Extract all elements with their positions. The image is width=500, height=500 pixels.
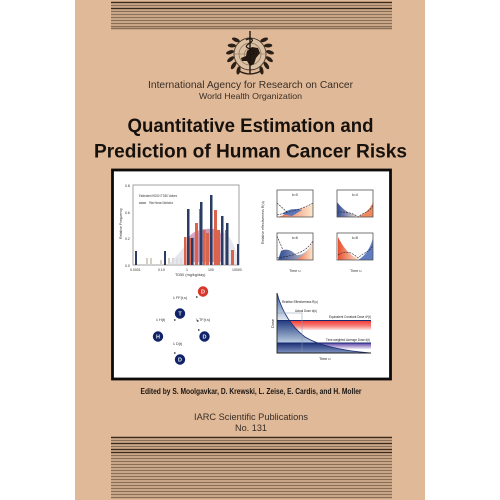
- axis labels: 0.2: [125, 237, 130, 241]
- icon: WHO emblem: [226, 31, 274, 75]
- axis labels: 100: [208, 268, 214, 272]
- wreath leaves: [226, 36, 274, 75]
- axis labels: 0.10: [158, 268, 165, 272]
- network diagram: [153, 286, 211, 365]
- equivalent constant dose chart: [271, 293, 371, 361]
- globe: [234, 38, 266, 70]
- node D red: D: [201, 290, 205, 296]
- histogram chart: Relative Frequency: [119, 208, 123, 239]
- series name: IARC Scientific Publications: [194, 412, 308, 423]
- axis labels: 1: [186, 268, 188, 272]
- small multiples chart: Time u: [289, 269, 300, 273]
- equivalent constant dose chart: Equivalent Constant Dose d*(t): [329, 315, 371, 319]
- histogram chart: Fitted Human Distribution: [149, 201, 173, 205]
- small multiples chart: Relative effectiveness R(u): [261, 201, 265, 244]
- title: [94, 115, 407, 162]
- axis labels: [125, 184, 242, 272]
- axis labels: 0.6: [125, 211, 130, 215]
- navy bars: [135, 195, 239, 265]
- distribution: [168, 229, 239, 264]
- panel top-left: k=0: [292, 193, 298, 197]
- node T: T: [178, 312, 182, 318]
- organisation subtitle: World Health Organization: [199, 92, 302, 101]
- panel bottom-right: k=8: [352, 236, 358, 240]
- top stripes: [111, 2, 392, 28]
- title: Prediction of Human Cancer Risks: [94, 140, 407, 162]
- equivalent constant dose chart: Time u: [319, 357, 330, 361]
- node H: H: [156, 334, 160, 340]
- staff and snake: [249, 31, 251, 74]
- equivalent constant dose chart: Actual Dose d(u): [295, 309, 317, 313]
- small multiples chart: Time u: [350, 269, 361, 273]
- network diagram: λ FF(t,s): [173, 296, 188, 300]
- red bars: [184, 209, 234, 265]
- title: Quantitative Estimation and: [128, 115, 374, 137]
- bottom stripes: [111, 438, 392, 498]
- axis labels: 0.8: [125, 184, 130, 188]
- legend: Estimated HD50 /TD50 Values: [139, 194, 177, 198]
- equivalent constant dose chart: Dose: [271, 319, 275, 328]
- histogram chart: TD50 (mg/kg/day): [175, 273, 206, 277]
- grey bars: [146, 258, 198, 265]
- figure panel: [112, 170, 390, 379]
- equivalent constant dose chart: Time-weighted Average Dose d(t): [326, 338, 370, 342]
- equivalent constant dose chart: Relative Effectiveness R(u): [282, 300, 318, 304]
- node D right: D: [203, 334, 207, 340]
- organisation name: International Agency for Research on Cancer: [148, 80, 354, 91]
- axis labels: 10000: [232, 268, 242, 272]
- network diagram: λ TF(t,s): [196, 318, 211, 322]
- small multiples chart: [261, 190, 373, 273]
- axis labels: 0.0001: [130, 268, 141, 272]
- book cover background: [75, 0, 425, 500]
- editors: Edited by S. Moolgavkar, D. Krewski, L. Zeise, E. Cardis, and H. Moller: [140, 387, 362, 396]
- network diagram: λ H(t): [156, 318, 166, 322]
- histogram chart: [119, 184, 242, 277]
- axis labels: 0.0: [125, 264, 130, 268]
- network diagram: λ D(t): [173, 342, 183, 346]
- panel bottom-left: k=6: [292, 236, 298, 240]
- series number: No. 131: [235, 423, 267, 434]
- panel top-right: k=4: [352, 193, 358, 197]
- node D bottom: D: [178, 358, 182, 364]
